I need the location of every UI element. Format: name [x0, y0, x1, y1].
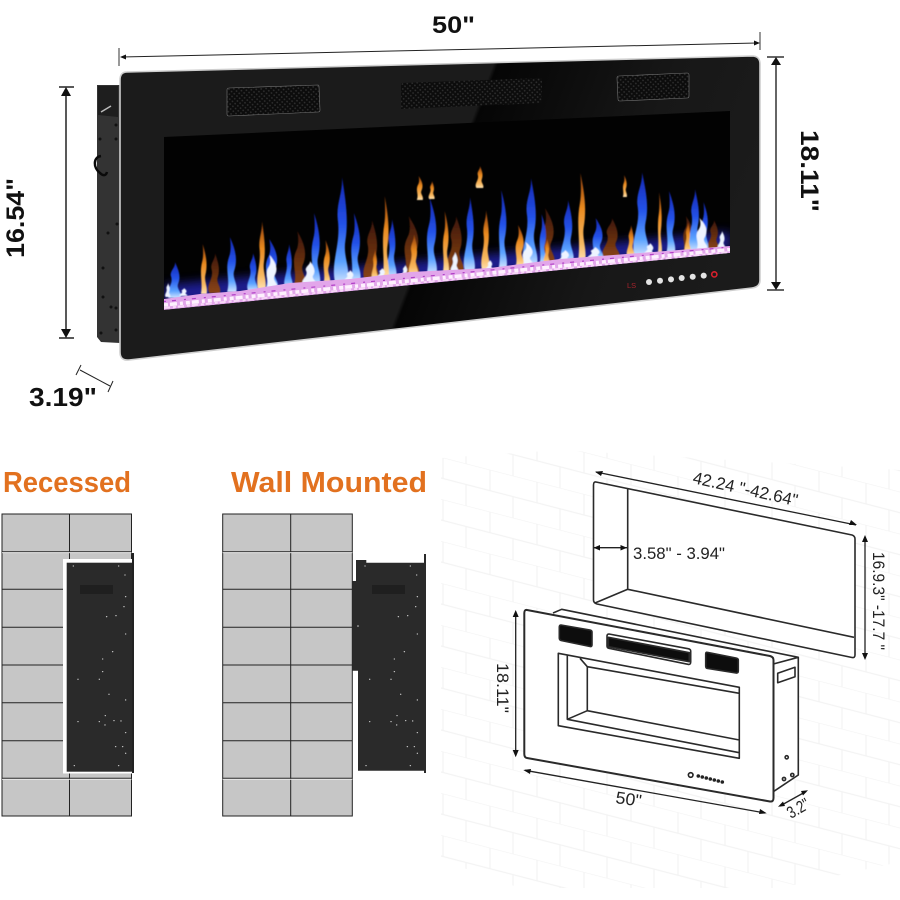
fireplace line drawing [524, 609, 798, 802]
dimension: recess height 16.9.3-17.7 in: 16.9.3" -17.7 " [869, 552, 888, 650]
heading: recessed: Recessed [3, 467, 131, 499]
dimension: unit depth 3.2 in: 3.2" [784, 795, 813, 822]
control buttons [688, 773, 724, 784]
crystal ember bed [164, 246, 730, 310]
firebox window [164, 111, 730, 310]
rear box and side panel [553, 609, 798, 792]
blue flames [167, 172, 708, 298]
dimension: recess depth 3.58-3.94 in [594, 544, 725, 563]
front glass bezel [120, 56, 760, 360]
orange flames [201, 166, 691, 294]
dimension: height 16.54 in [2, 87, 74, 338]
dim amber back flames [208, 208, 719, 293]
dimension: unit height 18.11 in: 18.11" [493, 663, 512, 713]
diagram: wall mounted installation [223, 514, 426, 816]
dimension: unit width 50 in [523, 769, 767, 814]
dimension: recess width 42.24-42.64 in [595, 468, 857, 525]
heading: wall mounted: Wall Mounted [231, 467, 427, 499]
vents [559, 625, 738, 673]
control panel buttons: LS [627, 281, 636, 290]
dimension: height 18.11 in: 18.11" [795, 130, 823, 212]
base glow [164, 232, 730, 305]
dimension: recess height 16.9.3-17.7 in [862, 535, 888, 660]
dimension: recess width 42.24-42.64 in: 42.24 "-42.64" [691, 468, 800, 510]
vent: center [401, 78, 542, 109]
fireplace side profile [67, 553, 134, 773]
brick wall [2, 514, 132, 816]
side handle and holes [778, 667, 795, 781]
dimension: depth 3.19 in [29, 365, 113, 412]
control panel buttons [627, 272, 717, 290]
vent: right [617, 73, 689, 101]
dimension: height 18.11 in [767, 57, 823, 290]
recess cut-out outline [594, 482, 855, 658]
firebox opening [558, 653, 739, 758]
rear housing [95, 85, 120, 343]
recess opening outline [65, 561, 132, 772]
dimension: width 50 in [119, 12, 760, 66]
dimension: recess depth 3.58-3.94 in: 3.58" - 3.94" [633, 544, 725, 563]
dimension: unit width 50 in: 50" [614, 788, 643, 811]
dimension: depth 3.19 in: 3.19" [29, 382, 97, 412]
front panel [524, 610, 774, 802]
panel: installation line diagram on brick wall [441, 450, 900, 888]
fireplace side profile [352, 554, 426, 773]
brick wall background [441, 450, 900, 888]
flames [164, 166, 730, 305]
dimension: unit height 18.11 in [493, 610, 519, 757]
dimension: width 50 in: 50" [432, 12, 475, 39]
fireplace product photo [95, 56, 760, 360]
vent: left [227, 85, 320, 116]
brick wall [223, 514, 352, 816]
white flame cores [165, 218, 725, 297]
diagram: recessed installation [2, 514, 134, 816]
dimension: height 16.54 in: 16.54" [2, 178, 30, 258]
